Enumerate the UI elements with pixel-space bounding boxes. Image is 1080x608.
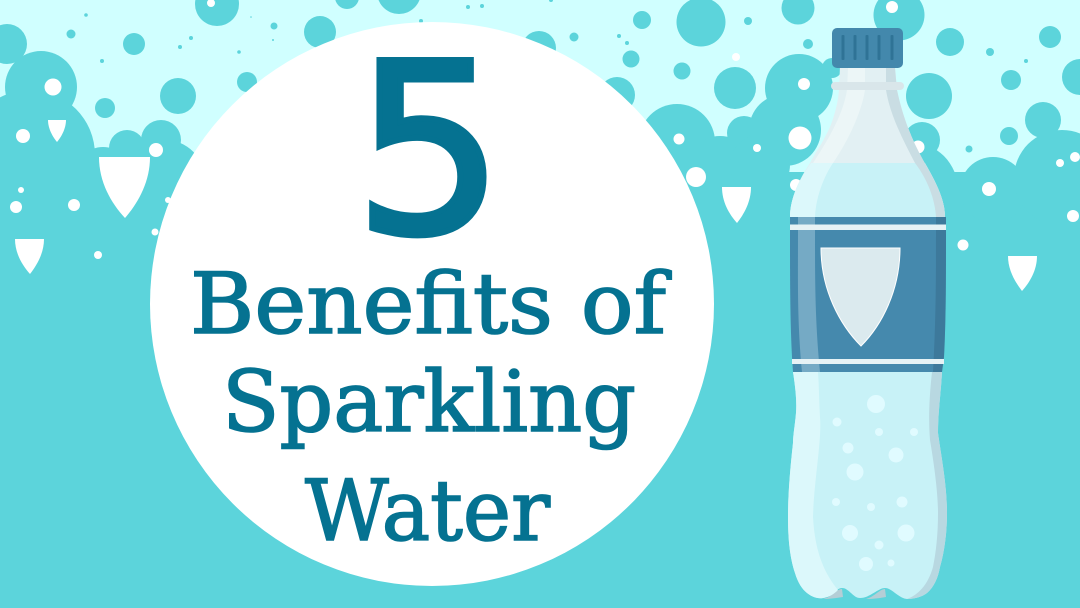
label shield (821, 248, 900, 346)
title (190, 13, 672, 560)
bottom label stripe (792, 359, 944, 364)
white shield shapes (15, 120, 1037, 291)
rising bubbles in bottle (832, 395, 918, 571)
label (790, 217, 946, 372)
floating bubbles (0, 0, 1080, 152)
left shoulder highlight (790, 163, 833, 217)
bottle lower body (788, 372, 947, 599)
water in shoulder (790, 163, 945, 217)
label right shade (933, 217, 946, 372)
bottle cap (832, 28, 903, 68)
lower right shade (907, 372, 947, 599)
neck ring (831, 82, 904, 90)
title line two: Sparkling (222, 353, 636, 451)
neck and shoulder highlight (813, 68, 865, 163)
numeral five: 5 (354, 13, 504, 288)
scallop shadows under bottle (822, 589, 886, 599)
title line three: Water (305, 462, 551, 560)
title line one: Benefits of (190, 255, 672, 353)
white bubbles (10, 0, 1080, 259)
white title circle (150, 22, 714, 586)
right shoulder shade (886, 68, 945, 217)
top label stripe (790, 224, 946, 230)
water bottle (788, 28, 947, 599)
bottle upper body (790, 66, 945, 217)
label left highlight (798, 217, 820, 372)
lower left highlight (788, 372, 838, 598)
